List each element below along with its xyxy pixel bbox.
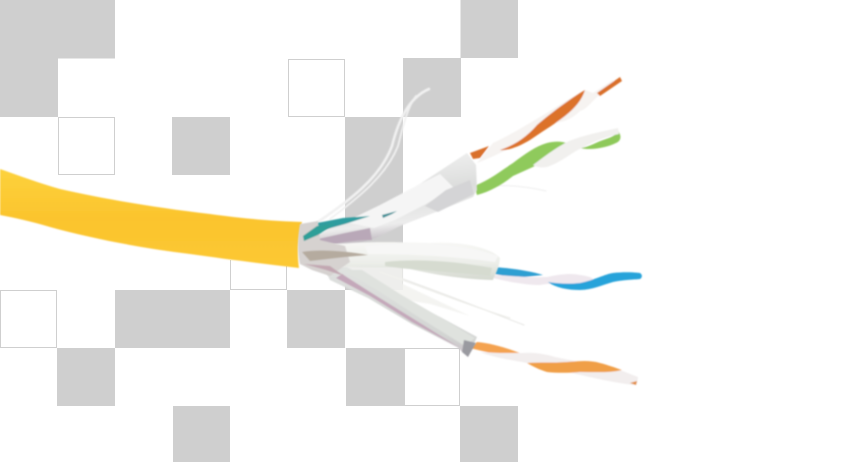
background: grey checker squares <box>0 0 518 462</box>
wire pair: green and white <box>474 128 620 195</box>
wire pair: orange and white <box>470 342 638 385</box>
wire pair: blue and white <box>493 267 642 290</box>
wire pair: brown-orange and white <box>470 77 622 163</box>
foil shield: orange pair <box>322 264 477 357</box>
background: outlined squares <box>0 60 460 406</box>
stray drain wires <box>318 89 546 325</box>
cut end of the cable: tangled shield and drain strands <box>298 221 368 276</box>
foil shield: blue pair <box>310 242 500 280</box>
foil shield: upper pair <box>300 153 477 250</box>
yellow cable jacket <box>0 169 302 268</box>
translucent loose strands over the grey square <box>340 262 470 316</box>
